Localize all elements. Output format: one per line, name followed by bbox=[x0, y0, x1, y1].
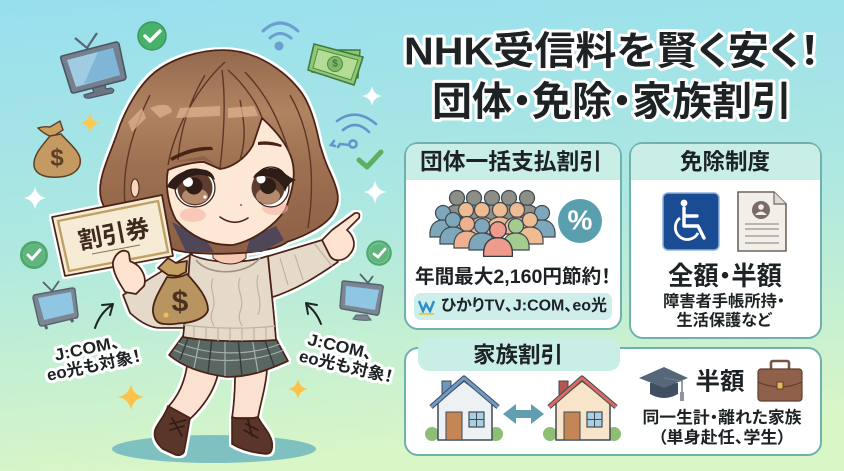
callout right: J:COM、 bbox=[306, 331, 374, 363]
icon: wheelchair sign bbox=[663, 193, 719, 250]
icon: money bag left: $ bbox=[50, 144, 64, 172]
icon: green check mark right bbox=[359, 152, 381, 167]
hair underside bbox=[172, 222, 284, 252]
mouth and nose bbox=[220, 204, 248, 222]
provider pill: ひかりTV、J:COM、eo光 bbox=[441, 296, 607, 314]
amount text: 全額・半額 bbox=[668, 261, 782, 291]
icon: gold sparkle bottom right bbox=[288, 379, 308, 399]
icon: briefcase bbox=[758, 361, 802, 401]
icon: green check top bbox=[138, 22, 166, 50]
hand pointing bbox=[322, 213, 360, 260]
coupon: 割引券 bbox=[76, 215, 152, 255]
icon: document bbox=[738, 192, 786, 251]
title: 団体・免除・家族割引 bbox=[432, 80, 792, 124]
panel: group discount bbox=[405, 143, 621, 329]
callout right: eo光も対象！ bbox=[297, 345, 395, 387]
skirt bbox=[169, 336, 288, 377]
family conditions text: 同一生計・離れた家族 bbox=[642, 407, 802, 427]
callout left: eo光も対象！ bbox=[45, 345, 143, 385]
icon: banknotes bbox=[308, 44, 363, 85]
callout left: J:COM、 bbox=[53, 333, 121, 365]
arrow: double bbox=[503, 404, 544, 424]
hair bbox=[100, 50, 338, 254]
icon: white sparkle right bbox=[364, 180, 386, 204]
sweater left sleeve bbox=[123, 254, 196, 328]
eye right bbox=[252, 167, 296, 207]
icon: percent badge bbox=[558, 199, 602, 243]
hand on coupon bbox=[113, 251, 145, 294]
icon: gold sparkle bottom left bbox=[118, 384, 144, 410]
icon: wifi with key bbox=[331, 115, 376, 148]
family conditions text bbox=[642, 407, 802, 447]
provider pill bbox=[414, 293, 612, 320]
icon: crowd bbox=[430, 190, 555, 256]
ground shadow bbox=[112, 435, 316, 463]
heading tab bbox=[418, 338, 620, 371]
heading: 団体一括支払割引 bbox=[420, 150, 602, 174]
hair strands bbox=[124, 62, 311, 228]
title bbox=[404, 30, 820, 124]
icon: television lower left bbox=[33, 281, 78, 329]
eligibility text bbox=[663, 292, 785, 330]
eligibility text: 生活保護など bbox=[676, 312, 773, 330]
icon: percent badge: % bbox=[568, 204, 593, 236]
coupon bbox=[52, 195, 173, 276]
icon: television top left bbox=[61, 33, 126, 98]
icon: television lower right bbox=[340, 274, 383, 320]
heading tab: 家族割引 bbox=[473, 342, 563, 368]
ear bbox=[131, 179, 139, 197]
legs bbox=[168, 366, 267, 419]
icon: green check right bbox=[368, 242, 390, 264]
character: girl with coupon bbox=[52, 50, 360, 455]
icon: gold sparkle upper left bbox=[80, 113, 100, 133]
eye left bbox=[167, 169, 215, 207]
half price text: 半額 bbox=[696, 368, 744, 396]
blush bbox=[180, 201, 288, 222]
arrow left bbox=[95, 304, 113, 328]
icon: banknotes: $ bbox=[332, 58, 338, 70]
heading: 免除制度 bbox=[680, 150, 770, 174]
icon: blue house bbox=[425, 378, 503, 441]
boots bbox=[154, 406, 272, 455]
callout right bbox=[297, 331, 395, 387]
icon: red house bbox=[543, 378, 621, 441]
callout left bbox=[45, 333, 143, 385]
face bbox=[167, 118, 294, 245]
title: NHK受信料を賢く安く！ bbox=[404, 30, 820, 74]
chest money bag bbox=[153, 258, 208, 324]
eligibility text: 障害者手帳所持・ bbox=[663, 292, 785, 310]
sweater body bbox=[183, 254, 276, 341]
chest money bag: $ bbox=[172, 286, 189, 318]
icon: money bag left bbox=[34, 121, 80, 177]
icon: wifi top bbox=[263, 23, 298, 50]
icon: white sparkle top right bbox=[362, 86, 382, 106]
icon: graduation cap bbox=[639, 367, 688, 401]
panel: family discount bbox=[405, 338, 821, 455]
arrow right bbox=[306, 303, 321, 324]
family conditions text: （単身赴任、学生） bbox=[658, 427, 786, 447]
savings text: 年間最大2,160円節約！ bbox=[415, 265, 611, 288]
panel: exemption bbox=[630, 143, 821, 338]
arm pointing bbox=[262, 240, 338, 298]
neck bbox=[212, 240, 246, 264]
icon: white sparkle left bbox=[24, 186, 46, 210]
icon: green check left bbox=[22, 242, 46, 268]
